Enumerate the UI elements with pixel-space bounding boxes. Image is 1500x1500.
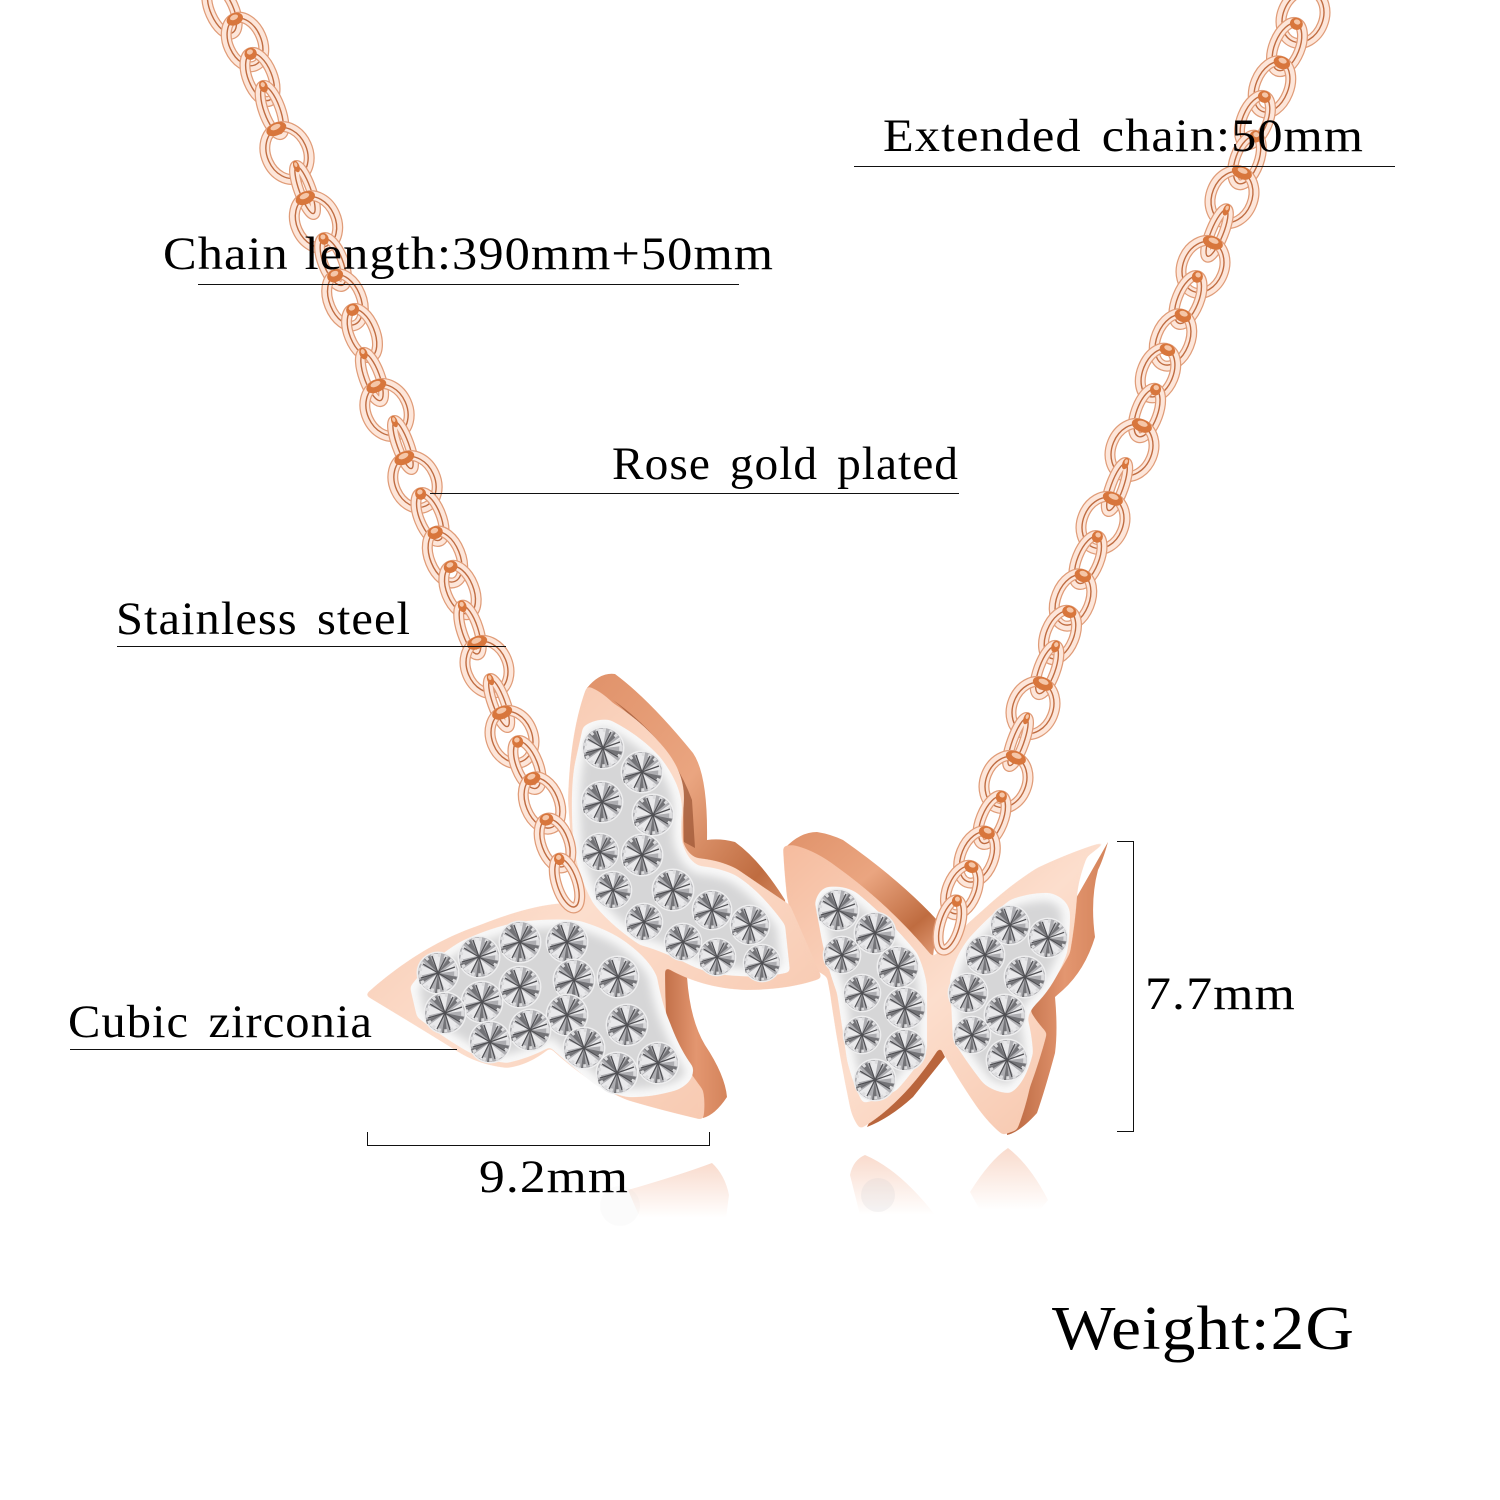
- left chain: [198, 0, 585, 911]
- label: chain length: Chain length:390mm+50mm: [163, 228, 774, 280]
- dimension: height 7.7mm: [1117, 842, 1296, 1132]
- left butterfly face: [365, 686, 822, 1120]
- left butterfly metal side: [587, 674, 790, 1118]
- left butterfly lower wing pave: [410, 920, 693, 1097]
- right butterfly left wing pave: [815, 887, 927, 1103]
- dimension: width 9.2mm: [368, 1132, 710, 1203]
- right butterfly pendant: [783, 832, 1110, 1135]
- label: cubic zirconia: Cubic zirconia: [68, 996, 373, 1048]
- right butterfly crystals: [816, 888, 1068, 1102]
- dimension: height 7.7mm: 7.7mm: [1145, 968, 1296, 1020]
- right chain: [933, 0, 1335, 953]
- right butterfly right wing pave: [950, 893, 1070, 1093]
- pendant reflection: [600, 1148, 1048, 1226]
- dimension: width 9.2mm: 9.2mm: [479, 1151, 629, 1203]
- left butterfly upper wing pave: [572, 720, 790, 976]
- right butterfly face: [783, 840, 1110, 1135]
- left butterfly pendant: [365, 674, 822, 1120]
- label: weight: Weight:2G: [1052, 1295, 1355, 1363]
- right butterfly metal side: [785, 832, 1108, 1135]
- left butterfly crystals: [416, 726, 781, 1094]
- label: rose gold plated: Rose gold plated: [612, 438, 959, 490]
- label: extended chain: Extended chain:50mm: [883, 110, 1364, 162]
- label: stainless steel: Stainless steel: [116, 593, 411, 645]
